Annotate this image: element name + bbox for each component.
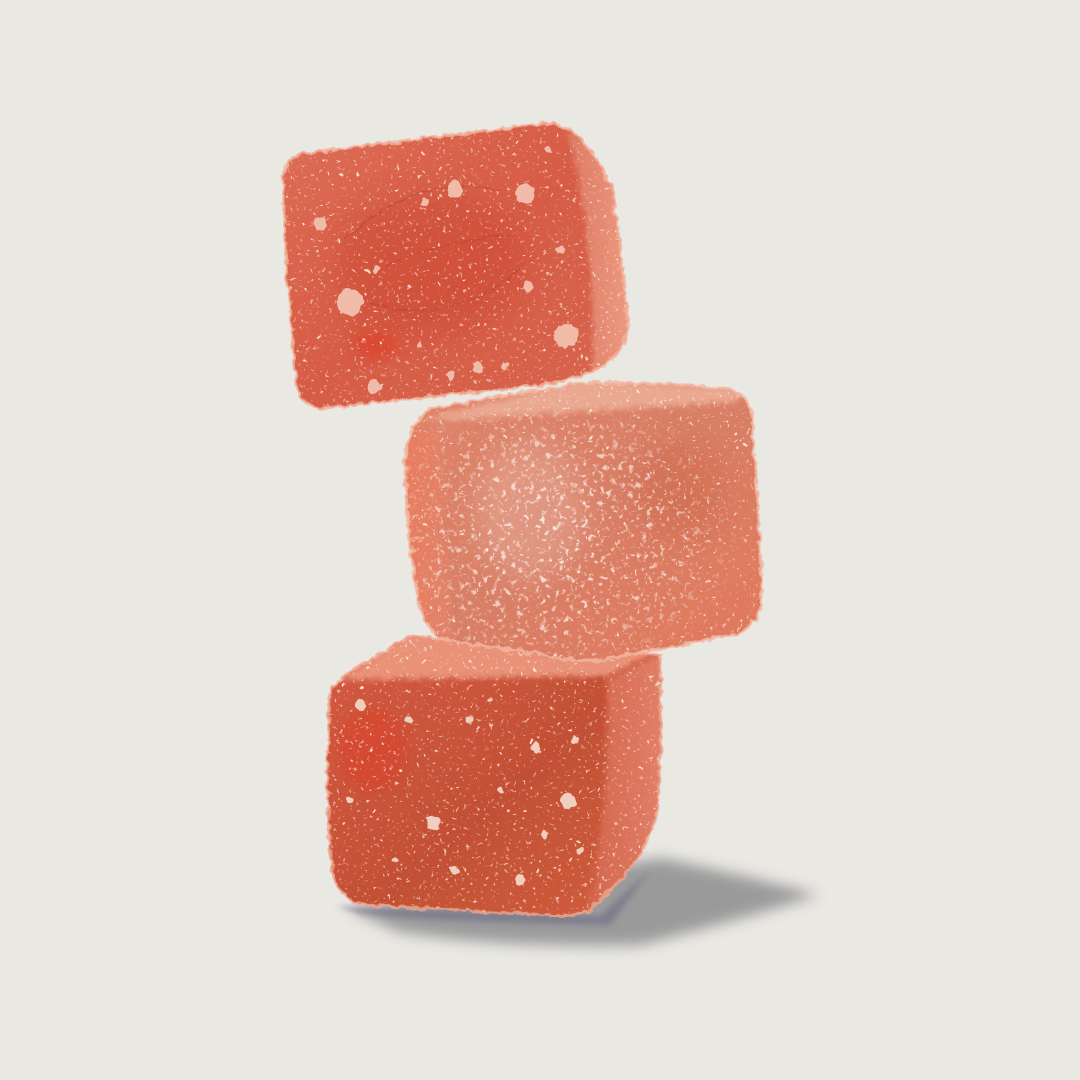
gummy: middle — [400, 378, 765, 668]
pale sugar rim: bottom — [327, 636, 661, 916]
pale sugar rim: middle — [406, 383, 762, 660]
top face of middle gummy — [420, 380, 750, 420]
sugar crystals: top — [313, 146, 578, 393]
top face of bottom gummy — [342, 636, 652, 684]
sugar crystals: bottom — [347, 697, 584, 885]
gummy: top — [278, 118, 633, 413]
right side of top gummy — [565, 122, 632, 378]
gummy: bottom — [320, 630, 665, 925]
right side of bottom gummy — [588, 655, 662, 909]
cast shadow — [336, 858, 818, 945]
illustration: stacked sugared gummies — [280, 120, 817, 954]
embossed leaf marks — [345, 186, 520, 311]
pale sugar rim: top — [283, 124, 628, 408]
left side of middle gummy — [406, 438, 448, 638]
